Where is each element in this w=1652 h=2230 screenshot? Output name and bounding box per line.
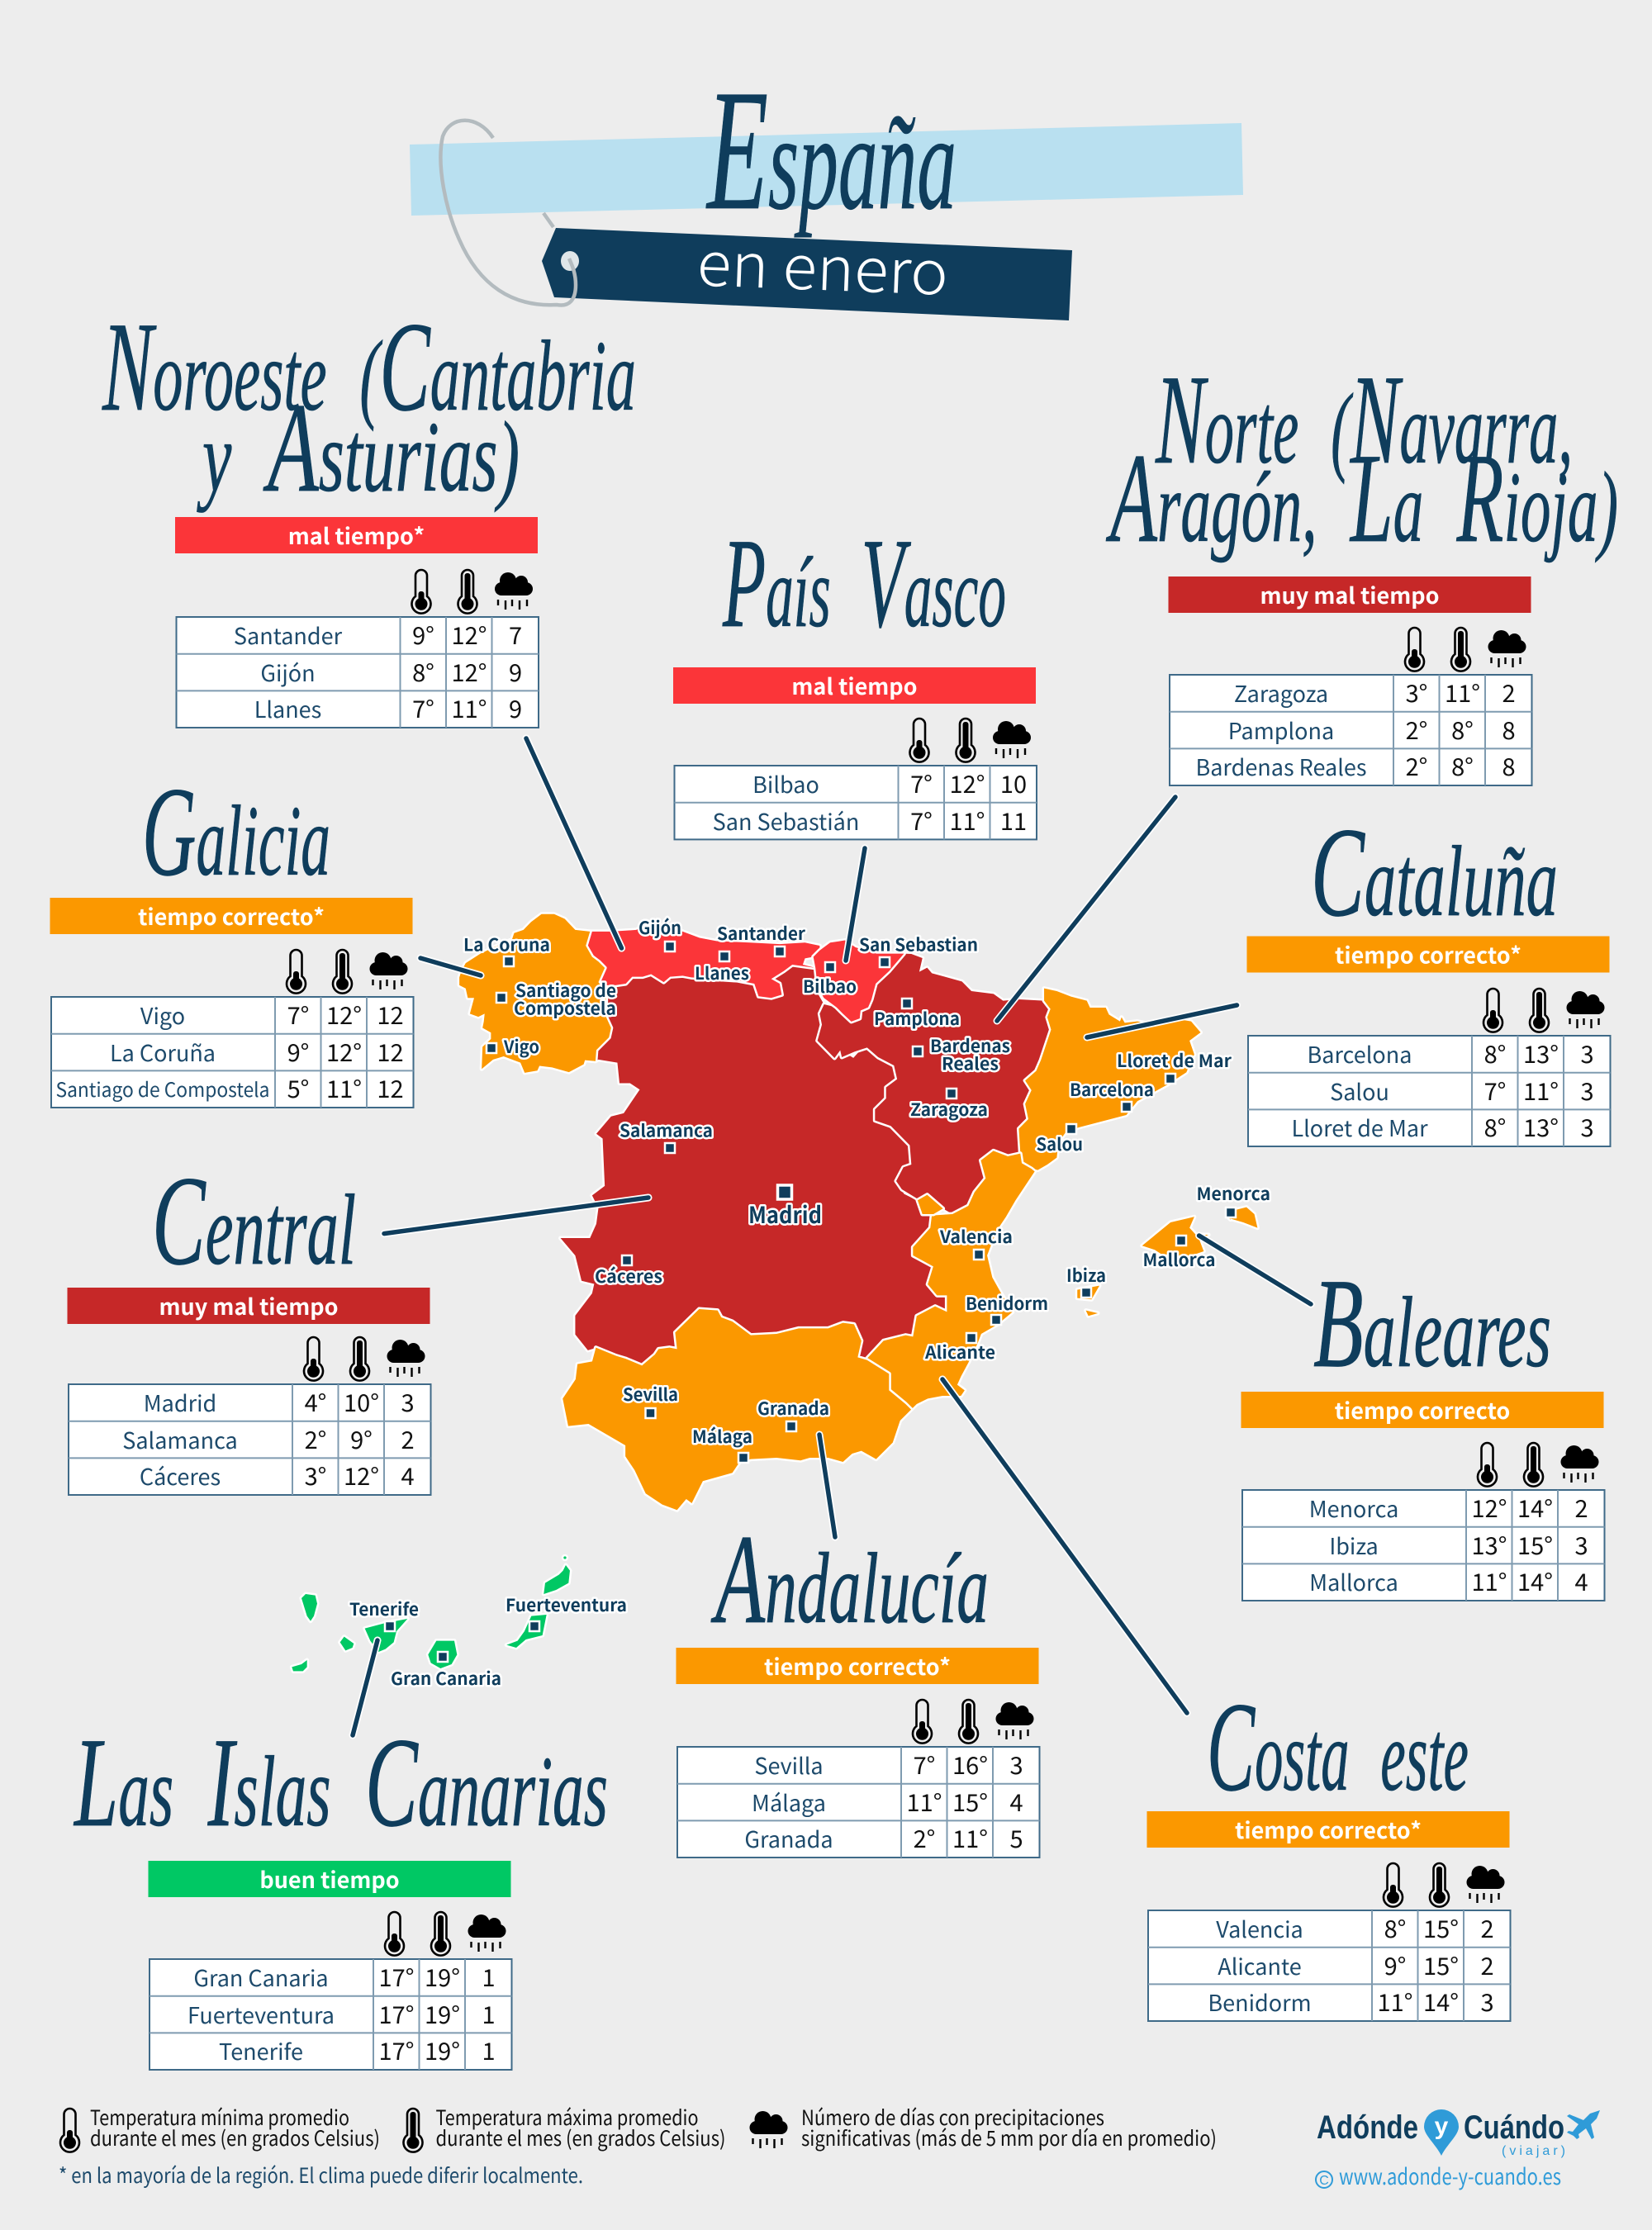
legend text: minimum temperature: durante el mes (en grados Celsius) (90, 2123, 380, 2152)
data table: La Coruña (110, 1036, 216, 1068)
data table: Bardenas Reales (1195, 750, 1367, 782)
panel: Galicia (50, 761, 413, 1108)
data table: Madrid (144, 1386, 216, 1418)
data table: 17° (379, 2033, 414, 2067)
legend text: maximum temperature: Temperatura máxima promedio (436, 2102, 699, 2132)
rating banner: muy mal tiempo (159, 1289, 339, 1321)
icon: plane (1567, 2110, 1600, 2139)
data table: Gran Canaria (193, 1961, 329, 1993)
panel: Baleares (1241, 1252, 1604, 1601)
data table: 3 (1480, 1984, 1494, 2019)
data table: 14° (1517, 1563, 1553, 1598)
data table: 15° (1423, 1948, 1459, 1982)
data table: Cáceres (140, 1459, 221, 1492)
data table: 14° (1517, 1490, 1553, 1525)
data table: Llanes (254, 692, 321, 724)
data table: 1 (482, 2033, 496, 2067)
data table: 13° (1523, 1036, 1559, 1070)
legend text: maximum temperature: durante el mes (en grados Celsius) (436, 2123, 725, 2152)
data table: 7° (1484, 1073, 1506, 1108)
panel: Costa este (1146, 1676, 1510, 2021)
data table: 19° (425, 1959, 460, 1994)
city labels: Santander (717, 921, 806, 946)
data table: 8° (1384, 1910, 1406, 1945)
data table: 15° (1517, 1527, 1553, 1562)
data table: 12° (326, 997, 362, 1032)
city labels: Gran Canaria (391, 1666, 501, 1691)
logo wordmark: Adónde: Adónde (1317, 2109, 1418, 2146)
data table: 3 (1580, 1036, 1594, 1070)
city labels: Ibiza (1066, 1263, 1106, 1288)
data table: 12 (377, 1034, 404, 1069)
city labels: Bardenas (930, 1033, 1010, 1058)
city labels: Santiago de (515, 978, 616, 1003)
city labels: Tenerife (349, 1597, 419, 1621)
heading: Las Islas Canarias: Las Islas Canarias (74, 1711, 608, 1853)
data table: 19° (425, 2033, 460, 2067)
heading: Noroeste (102, 296, 636, 519)
rating banner (1247, 937, 1609, 973)
weather icons (910, 719, 1031, 762)
city labels: Valencia (939, 1224, 1013, 1249)
city labels: Vigo (503, 1034, 539, 1059)
data table: 2° (1406, 748, 1427, 783)
data table: 11° (907, 1784, 942, 1819)
region: Costa este (867, 1151, 1035, 1410)
weather icons (1478, 1443, 1599, 1487)
heading: Noroeste: Noroeste (Cantabria (102, 296, 636, 438)
data table: 9 (509, 654, 522, 689)
data table: Lloret de Mar (1291, 1111, 1428, 1143)
heading: Costa este: Costa este (1207, 1676, 1469, 1818)
data table: 9° (1384, 1948, 1406, 1982)
heading: Andalucía: Andalucía (710, 1508, 989, 1650)
rating banner (149, 1861, 510, 1897)
data table: 2° (305, 1421, 326, 1456)
legend text: rain days (801, 2102, 1217, 2152)
panel: Las Islas Canarias (74, 1711, 608, 2070)
region: País Vasco (814, 941, 904, 1022)
data table: 10° (344, 1384, 379, 1419)
data table (677, 1747, 1039, 1858)
data table: 4 (1574, 1563, 1588, 1598)
city labels: Granada (757, 1396, 829, 1421)
data table: 3 (1009, 1747, 1023, 1782)
region: Andalucía (563, 1309, 911, 1510)
data table: 8° (412, 654, 434, 689)
data table: 2 (1502, 675, 1516, 709)
data table: 7° (914, 1747, 935, 1782)
data table: Málaga (752, 1786, 826, 1818)
city labels: Gijón (638, 915, 681, 940)
rating banner: tiempo correcto* (1235, 1813, 1422, 1845)
city labels: Salamanca (620, 1118, 713, 1143)
data table: San Sebastián (713, 804, 859, 837)
heading: Norte (1106, 349, 1618, 569)
data table: 9° (350, 1421, 373, 1456)
data table: 8° (1451, 748, 1474, 783)
data table: Alicante (1218, 1949, 1302, 1981)
city labels: Zaragoza (910, 1097, 988, 1122)
rating banner (673, 667, 1036, 704)
city labels: Llanes (695, 961, 749, 985)
logo pin: y (1435, 2113, 1449, 2140)
city labels: Barcelona (1070, 1077, 1154, 1102)
rating banner (1168, 576, 1531, 613)
data table: 4 (1009, 1784, 1023, 1819)
data table: 4 (401, 1458, 415, 1492)
data table: 16° (952, 1747, 988, 1782)
data table: Granada (744, 1822, 833, 1854)
data table: 13° (1523, 1109, 1559, 1144)
data table: 12° (452, 617, 487, 652)
weather icons (287, 950, 408, 994)
data table: 17° (379, 1996, 414, 2031)
tag string (440, 121, 576, 306)
data table: Benidorm (1208, 1986, 1312, 2018)
data table: 14° (1423, 1984, 1459, 2019)
data table: 15° (952, 1784, 988, 1819)
data table: 11° (950, 803, 985, 837)
data table: Ibiza (1329, 1529, 1379, 1561)
data table: 19° (425, 1996, 460, 2031)
data table (1148, 1910, 1510, 2021)
data table: 9° (412, 617, 434, 652)
data table: 5° (287, 1070, 309, 1105)
data table: 3 (401, 1384, 415, 1419)
rating banner (676, 1648, 1039, 1684)
weather icons (1483, 989, 1604, 1032)
rating banner: tiempo correcto* (764, 1649, 951, 1682)
data table (51, 997, 413, 1108)
data table: Bilbao (752, 767, 819, 799)
logo website: www.adonde-y-cuando.es (1339, 2159, 1561, 2191)
city labels: Fuerteventura (506, 1592, 627, 1617)
heading: Noroeste: y Asturias) (197, 377, 520, 519)
tag hole (561, 251, 579, 271)
data table: Pamplona (1228, 714, 1334, 746)
data table: 2 (1480, 1910, 1494, 1945)
weather icons (1384, 1863, 1505, 1907)
data table: 11° (1472, 1563, 1507, 1598)
region: Central (561, 965, 947, 1366)
region: Galicia (459, 914, 611, 1073)
legend (59, 2102, 1217, 2190)
title: España: España (705, 55, 957, 246)
data table (150, 1959, 512, 2070)
rating banner: tiempo correcto* (138, 899, 325, 932)
data table (69, 1384, 431, 1495)
data table: Salamanca (122, 1423, 238, 1455)
rating banner: mal tiempo* (288, 519, 425, 551)
city labels: Compostela (514, 996, 616, 1021)
city labels: Salou (1036, 1132, 1083, 1156)
region: Baleares (1077, 1208, 1257, 1316)
data table: 7° (910, 766, 933, 800)
data table: 12° (344, 1458, 379, 1492)
footnote: * en la mayoría de la región. El clima puede diferir localmente. (59, 2160, 583, 2190)
city labels: Cáceres (595, 1264, 662, 1288)
data table: 7 (509, 617, 522, 652)
data table: 12° (452, 654, 487, 689)
data table: Zaragoza (1234, 676, 1328, 709)
panel: País Vasco (673, 512, 1037, 839)
data table: Menorca (1309, 1492, 1398, 1524)
data table: 3 (1574, 1527, 1588, 1562)
logo pin (1424, 2109, 1459, 2156)
data table: 11° (452, 690, 487, 725)
data table: 11° (1445, 675, 1480, 709)
legend text: maximum temperature (436, 2102, 725, 2152)
panel: Central (68, 1150, 431, 1495)
data table (177, 617, 539, 728)
subtitle tag (542, 228, 1072, 320)
data table (674, 766, 1037, 839)
data table: 3 (1580, 1109, 1594, 1144)
data table: 2 (1574, 1490, 1588, 1525)
data table: 2° (1406, 712, 1427, 747)
data table: Mallorca (1309, 1565, 1398, 1597)
panel: Cataluña (1247, 801, 1611, 1146)
data table (1242, 1490, 1604, 1601)
data table: 9° (287, 1034, 309, 1069)
data table: 2 (1480, 1948, 1494, 1982)
panel: Noroeste (102, 296, 636, 728)
panel: Andalucía (676, 1508, 1039, 1858)
city labels: Mallorca (1143, 1247, 1216, 1272)
city labels: La Coruna (463, 932, 550, 956)
city labels (349, 915, 1270, 1691)
city labels: Benidorm (966, 1291, 1048, 1316)
data table: 8 (1502, 712, 1516, 747)
subtitle: en enero: en enero (695, 215, 950, 313)
data table: Tenerife (219, 2034, 303, 2066)
legend text: minimum temperature (90, 2102, 380, 2152)
data table (1170, 675, 1531, 785)
city labels: Bilbao (803, 974, 857, 999)
data table: 3° (305, 1458, 326, 1492)
icon: maximum temperature (403, 2109, 423, 2152)
rating banner (68, 1288, 430, 1324)
data table: 7° (287, 997, 309, 1032)
city labels: Madrid (748, 1198, 822, 1231)
data table: 9 (509, 690, 522, 725)
region: Rincón de Ademuz (918, 1195, 943, 1214)
data table: 8° (1451, 712, 1474, 747)
legend text: rain days: significativas (más de 5 mm por día en promedio) (801, 2123, 1217, 2152)
data table: 11° (326, 1070, 362, 1105)
logo (1316, 2109, 1600, 2191)
data table: 2° (914, 1820, 935, 1855)
region: Noroeste (586, 923, 819, 998)
data table: 8° (1484, 1036, 1506, 1070)
rating banner: tiempo correcto* (1335, 938, 1521, 970)
data table: Gijón (260, 656, 316, 688)
data table: 7° (412, 690, 434, 725)
rating banner: mal tiempo (791, 669, 918, 701)
heading: País Vasco: País Vasco (722, 512, 1006, 654)
data table: Salou (1330, 1075, 1389, 1107)
city markers (385, 942, 1236, 1662)
city labels: San Sebastian (859, 932, 978, 956)
data table: 13° (1472, 1527, 1507, 1562)
data table: 3 (1580, 1073, 1594, 1108)
rating banner (1146, 1811, 1510, 1848)
weather icons (1405, 628, 1526, 671)
data table: 1 (482, 1996, 496, 2031)
title block (410, 55, 1243, 320)
data table: 17° (379, 1959, 414, 1994)
rating banner: muy mal tiempo (1260, 578, 1440, 610)
data table: 12° (950, 766, 985, 800)
logo wordmark: Cuándo: Cuándo (1464, 2109, 1564, 2146)
data table: 11° (952, 1820, 988, 1855)
city labels: Lloret de Mar (1117, 1048, 1232, 1073)
logo website: C (1319, 2174, 1329, 2188)
legend text: minimum temperature: Temperatura mínima promedio (90, 2102, 349, 2132)
data table: 3° (1406, 675, 1427, 709)
logo tagline: (viajar) (1502, 2144, 1565, 2158)
region: Cataluña (1018, 989, 1200, 1170)
data table: 12 (377, 1070, 404, 1105)
rating banner (50, 898, 413, 934)
data table: Vigo (140, 999, 185, 1031)
data table: 4° (305, 1384, 326, 1419)
rating banner (175, 517, 538, 553)
city labels: Reales (942, 1051, 999, 1075)
panel: Norte (1106, 349, 1618, 785)
data table: 11° (1378, 1984, 1412, 2019)
city labels: Málaga (692, 1424, 752, 1449)
data table: Valencia (1216, 1912, 1303, 1944)
icon: rain days (750, 2111, 788, 2148)
heading: Baleares: Baleares (1313, 1252, 1551, 1394)
rating banner: tiempo correcto (1335, 1393, 1510, 1426)
weather icons (411, 570, 533, 614)
map of Spain (292, 914, 1270, 1691)
data table: 8° (1484, 1109, 1506, 1144)
data table: 11° (1523, 1073, 1559, 1108)
data table: Santander (234, 619, 343, 651)
heading: Central: Central (152, 1150, 356, 1292)
data table: 15° (1423, 1910, 1459, 1945)
weather icons (304, 1337, 425, 1381)
data table: 12 (377, 997, 404, 1032)
data table: 2 (401, 1421, 415, 1456)
rating banner: buen tiempo (259, 1862, 400, 1895)
weather icons (385, 1912, 506, 1956)
city labels: Pamplona (874, 1006, 960, 1031)
weather icons (913, 1700, 1034, 1744)
data table: 12° (326, 1034, 362, 1069)
data table: Sevilla (754, 1748, 824, 1781)
city labels: Alicante (924, 1340, 995, 1364)
pointer lines (353, 738, 1311, 1735)
region: Norte (818, 954, 1051, 1214)
data table: 5 (1009, 1820, 1023, 1855)
title band (410, 123, 1243, 216)
city labels: Sevilla (623, 1382, 678, 1407)
data table: 8 (1502, 748, 1516, 783)
data table: 11 (1000, 803, 1027, 837)
legend text: rain days: Número de días con precipitaciones (801, 2102, 1104, 2132)
data table: 12° (1472, 1490, 1507, 1525)
data table: 7° (910, 803, 933, 837)
data table: 10 (1000, 766, 1027, 800)
data table: Fuerteventura (188, 1998, 335, 2030)
icon: minimum temperature (60, 2109, 79, 2152)
data table: Santiago de Compostela (56, 1074, 269, 1103)
data table: Barcelona (1308, 1037, 1412, 1070)
data table (1248, 1036, 1611, 1146)
city labels: Menorca (1196, 1181, 1270, 1206)
data table: 1 (482, 1959, 496, 1994)
heading: Galicia: Galicia (142, 761, 330, 903)
region: Las Islas Canarias (292, 1556, 570, 1671)
rating banner (1241, 1392, 1604, 1428)
